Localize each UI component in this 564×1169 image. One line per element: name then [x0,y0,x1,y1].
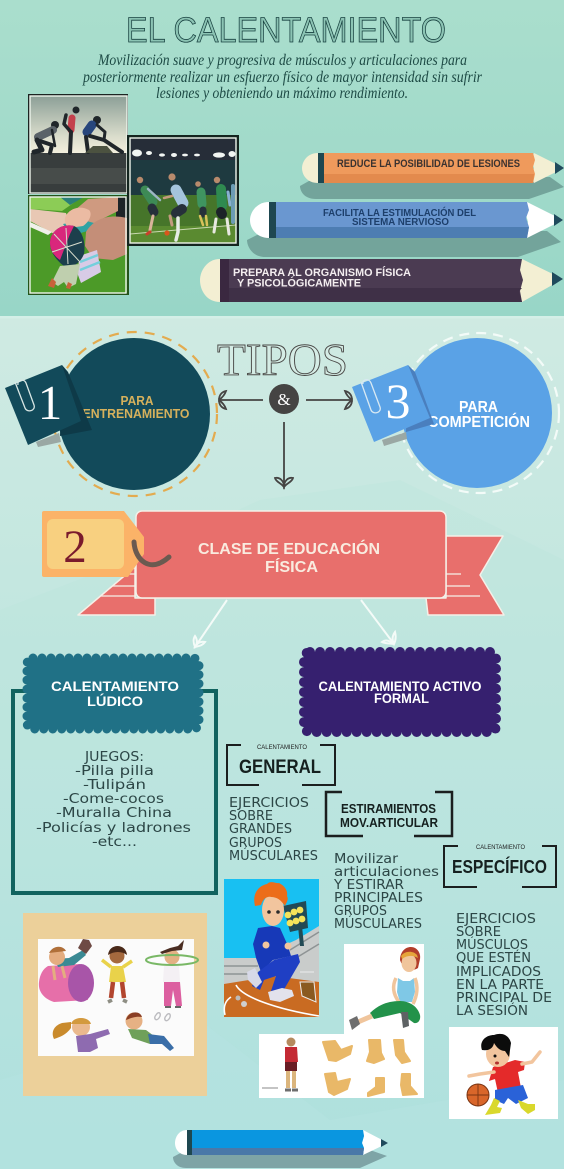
text block: movilizar articulaciones [333,852,439,932]
panel: children playing illustration [23,913,207,1096]
circle 3: para competicion: COMPETICIÓN [428,413,530,431]
text block: ejercicios especificos: MÚSCULOS [456,937,528,953]
title: EL CALENTAMIENTO [126,11,446,50]
text block: movilizar articulaciones: Movilizar [334,852,399,867]
pencil: prepara al organismo: PREPARA AL ORGANISMO FÍSICA [233,266,411,279]
child lying with dizzy swirl [126,1012,174,1051]
text block: movilizar articulaciones: MÚSCULARES [334,916,422,932]
pencil: facilita la estimulacion: SISTEMA NERVIOSO [352,216,449,228]
label: calentamiento general: GENERAL [239,757,321,778]
label: estiramientos mov. articular: ESTIRAMIENTOS [341,801,436,816]
label: calentamiento especifico [444,844,556,887]
heading: calentamiento activo formal: FORMAL [374,691,429,706]
text block: ejercicios especificos: LA SESIÓN [456,1003,528,1019]
pencil: facilita la estimulacion [247,202,563,257]
heading: calentamiento ludico [27,658,199,729]
arrow: to calentamiento ludico [194,600,227,647]
panel: calentamiento ludico frame [13,691,216,893]
label: estiramientos mov. articular: MOV.ARTICULAR [340,815,439,830]
illustration: woman doing leg stretch [344,944,424,1034]
player 4 [214,177,230,234]
text block: juegos: JUEGOS: [84,750,144,765]
photo: athletes stretching at dusk [28,94,128,194]
circle 1: para entrenamiento: ENTRENAMIENTO [82,407,190,421]
text block: ejercicios especificos: SOBRE [456,925,501,940]
pencil: bottom decoration [173,1130,388,1168]
text block: ejercicios especificos: PRINCIPAL DE [456,991,552,1006]
label: calentamiento especifico: CALENTAMIENTO [476,844,525,851]
label: calentamiento general [227,744,335,785]
heading: calentamiento ludico: CALENTAMIENTO [51,678,179,694]
illustration: boy dribbling basketball [449,1027,558,1119]
heading: calentamiento ludico: LÚDICO [87,692,143,709]
intro text block [82,52,483,102]
circle 1: para entrenamiento: PARA [120,394,154,408]
pencil: facilita la estimulacion: FACILITA LA ESTIMULACIÓN DEL [323,206,477,219]
child on pink barrel [39,939,94,1002]
arrow: to circle 3 [306,391,352,409]
banner ribbon: clase de educacion fisica [78,511,504,615]
ampersand badge: & [277,390,291,409]
text block: ejercicios generales: MÚSCULARES [229,848,318,864]
pencil: prepara al organismo: Y PSICOLÓGICAMENTE [237,276,361,290]
intro text block: lesiones y obteniendo un máximo rendimiento. [156,85,408,102]
text block: movilizar articulaciones: GRUPOS [334,904,387,919]
intro text block: posteriormente realizar un esfuerzo físico de mayor intensidad sin sufrir [82,69,483,86]
illustration: standing boy and ankle exercises [259,1034,424,1098]
text block: ejercicios especificos: QUE ESTÉN [456,950,531,966]
note 1 with paper clip: 1 [38,375,62,430]
photo: football team training in stadium [127,135,239,246]
photo: runner holding shoe on grass [28,195,129,295]
player 1 [137,177,160,234]
text block: ejercicios especificos: EN LA PARTE [456,978,544,993]
text block: ejercicios generales: GRANDES [229,822,292,837]
label: calentamiento general: CALENTAMIENTO [257,744,307,751]
background: lower section [0,318,564,1169]
banner ribbon: clase de educacion fisica: CLASE DE EDUCACIÓN [198,539,380,558]
player 2 [164,173,183,240]
tag: number 2: 2 [63,521,87,573]
note 3 with paper clip: 3 [386,373,410,429]
text block: juegos: -Pilla pilla [75,764,154,779]
player 3 [195,181,207,225]
text block: juegos: -Muralla China [56,806,172,821]
circle 1: para entrenamiento [5,332,217,496]
text block: juegos [36,750,191,850]
pencil: prepara al organismo [200,259,563,302]
text block: ejercicios generales [229,796,318,864]
note 1 with paper clip [5,365,92,447]
text block: ejercicios generales: GRUPOS [229,836,282,851]
pencil: reduce la posibilidad de lesiones: REDUCE LA POSIBILIDAD DE LESIONES [337,158,520,170]
text block: ejercicios generales: EJERCICIOS [229,796,309,811]
label: calentamiento especifico: ESPECÍFICO [452,856,547,877]
note 3 with paper clip [352,365,434,446]
pencil: reduce la posibilidad de lesiones [300,153,564,199]
text block: movilizar articulaciones: Y ESTIRAR [333,878,404,893]
text block: juegos: -Come-cocos [63,792,164,807]
circle 3: para competicion [352,333,559,493]
text block: ejercicios especificos [456,912,552,1019]
text block: juegos: -Policías y ladrones [36,821,191,836]
text block: ejercicios especificos: EJERCICIOS [456,912,536,927]
text block: ejercicios especificos: IMPLICADOS [456,965,541,980]
arrow: to circle 1 [219,391,263,409]
heading: tipos: TIPOS [217,335,348,385]
arrow: to banner [275,422,293,487]
background: top section [0,0,564,316]
text block: movilizar articulaciones: PRINCIPALES [334,891,423,906]
text block: juegos: -etc... [92,835,137,850]
ampersand badge [269,384,299,414]
text block: juegos: -Tulipán [83,778,146,793]
banner ribbon: clase de educacion fisica: FÍSICA [265,557,318,576]
section divider band [0,316,564,318]
child with hula hoop [146,940,198,1007]
heading: calentamiento activo formal: CALENTAMIENTO ACTIVO [318,679,482,694]
tag: number 2 [42,511,169,577]
label: estiramientos mov. articular [326,792,452,836]
illustration: boy in blue tracksuit on running track [224,879,319,1017]
intro text block: Movilización suave y progresiva de músculos y articulaciones para [97,52,467,69]
arrow: to calentamiento activo [361,600,396,644]
text block: movilizar articulaciones: articulaciones [334,865,439,880]
child with yellow shirt [102,946,132,1002]
heading: calentamiento activo formal [304,652,496,732]
circle 3: para competicion: PARA [459,399,498,416]
text block: ejercicios generales: SOBRE [229,809,273,824]
child sitting with ponytail [53,1018,110,1052]
